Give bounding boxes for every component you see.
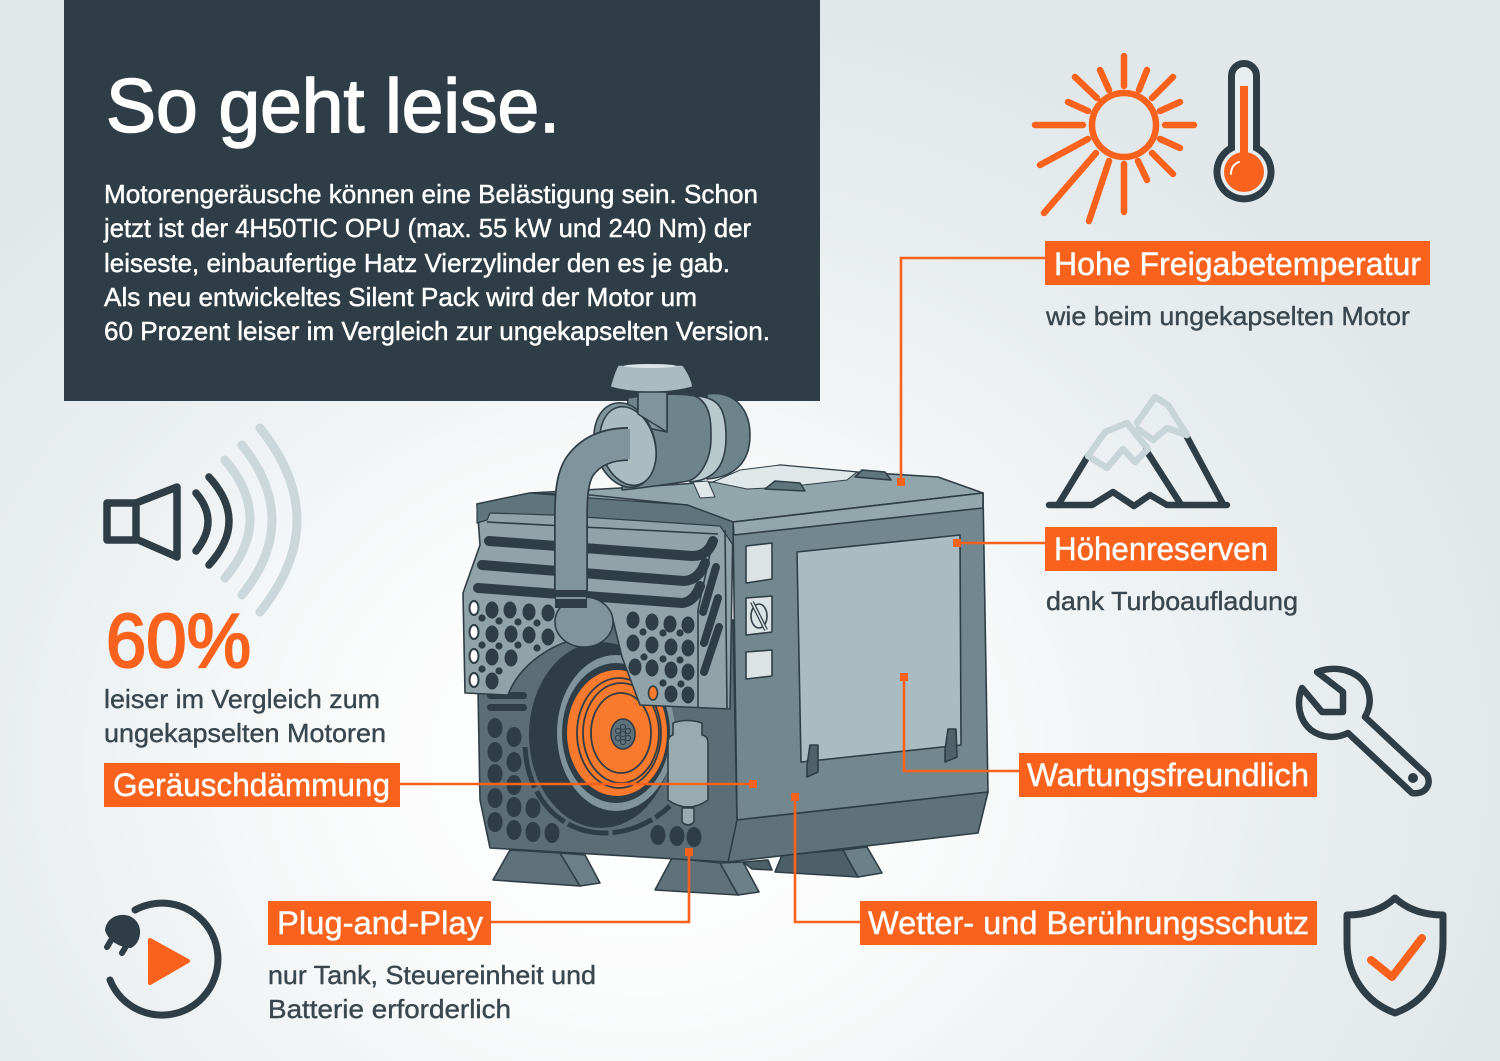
- engine illustration: [463, 364, 988, 895]
- louvres: [478, 522, 727, 708]
- icon: shield check: [1347, 898, 1443, 1013]
- text: Höhenreserven note: dank Turboaufladung: [1046, 586, 1298, 616]
- stat: 60%: 60%: [106, 599, 251, 684]
- text: Freigabetemperatur note: wie beim ungekapselten Motor: [1045, 301, 1410, 331]
- engine feet: [493, 847, 882, 895]
- label: Plug-and-Play: Plug-and-Play: [277, 905, 483, 941]
- text: Plug-and-Play note: nur Tank, Steuereinheit und: [268, 960, 596, 990]
- hatch bracket: [693, 481, 715, 498]
- label: Wetter- und Berührungsschutz: Wetter- und Berührungsschutz: [868, 905, 1309, 941]
- front lower face: [478, 620, 737, 862]
- intake pipe: [555, 444, 630, 647]
- panel: intro: [64, 0, 820, 401]
- lower vent holes: [487, 692, 702, 847]
- icon: speaker: [107, 428, 297, 612]
- icon: wrench: [1299, 669, 1429, 793]
- top clips: [765, 470, 891, 491]
- front upper grille: [463, 493, 733, 709]
- icon: sun: [1035, 56, 1194, 221]
- top dark band: [477, 493, 733, 545]
- label: Wartungsfreundlich: Wartungsfreundlich: [1027, 757, 1309, 793]
- icon: plug and play: [105, 903, 218, 1015]
- housing top: [477, 465, 983, 522]
- top hatch: [713, 465, 857, 489]
- side housing: [728, 493, 988, 862]
- white edge holes: [470, 601, 478, 687]
- control squares: [746, 543, 772, 679]
- callout lines: [400, 258, 1045, 922]
- text: Plug-and-Play note: Batterie erforderlich: [268, 994, 511, 1024]
- icon: thermometer: [1217, 64, 1271, 199]
- text: stat description: leiser im Vergleich zum: [104, 684, 380, 714]
- intro text: Motorengeräusche können eine Belästigung sein. Schon: [104, 179, 758, 209]
- intro text: leiseste, einbaufertige Hatz Vierzylinder den es je gab.: [104, 248, 730, 278]
- label: Hohe Freigabetemperatur: Hohe Freigabetemperatur: [1054, 246, 1421, 282]
- icon: mountains: [1049, 397, 1227, 506]
- label: Geräuschdämmung: Geräuschdämmung: [113, 767, 390, 803]
- intro text: [103, 179, 770, 346]
- label: Höhenreserven: Höhenreserven: [1054, 531, 1268, 567]
- door latches: [807, 729, 957, 777]
- switch knob: [751, 602, 767, 630]
- callout dots: [685, 478, 961, 856]
- title: So geht leise.: [106, 64, 560, 149]
- grille holes: [478, 602, 694, 704]
- text: stat description: [104, 684, 386, 748]
- service door: [797, 535, 961, 762]
- air filter: [585, 364, 750, 494]
- intro text: jetzt ist der 4H50TIC OPU (max. 55 kW und 240 Nm) der: [103, 213, 751, 243]
- fan opening: [525, 642, 675, 833]
- intro text: Als neu entwickeltes Silent Pack wird der Motor um: [104, 282, 697, 312]
- oil filter: [668, 720, 708, 825]
- intro text: 60 Prozent leiser im Vergleich zur ungekapselten Version.: [104, 316, 770, 346]
- orange fan disc: [567, 670, 667, 796]
- text: Plug-and-Play note: [268, 960, 596, 1024]
- text: stat description: ungekapselten Motoren: [104, 718, 386, 748]
